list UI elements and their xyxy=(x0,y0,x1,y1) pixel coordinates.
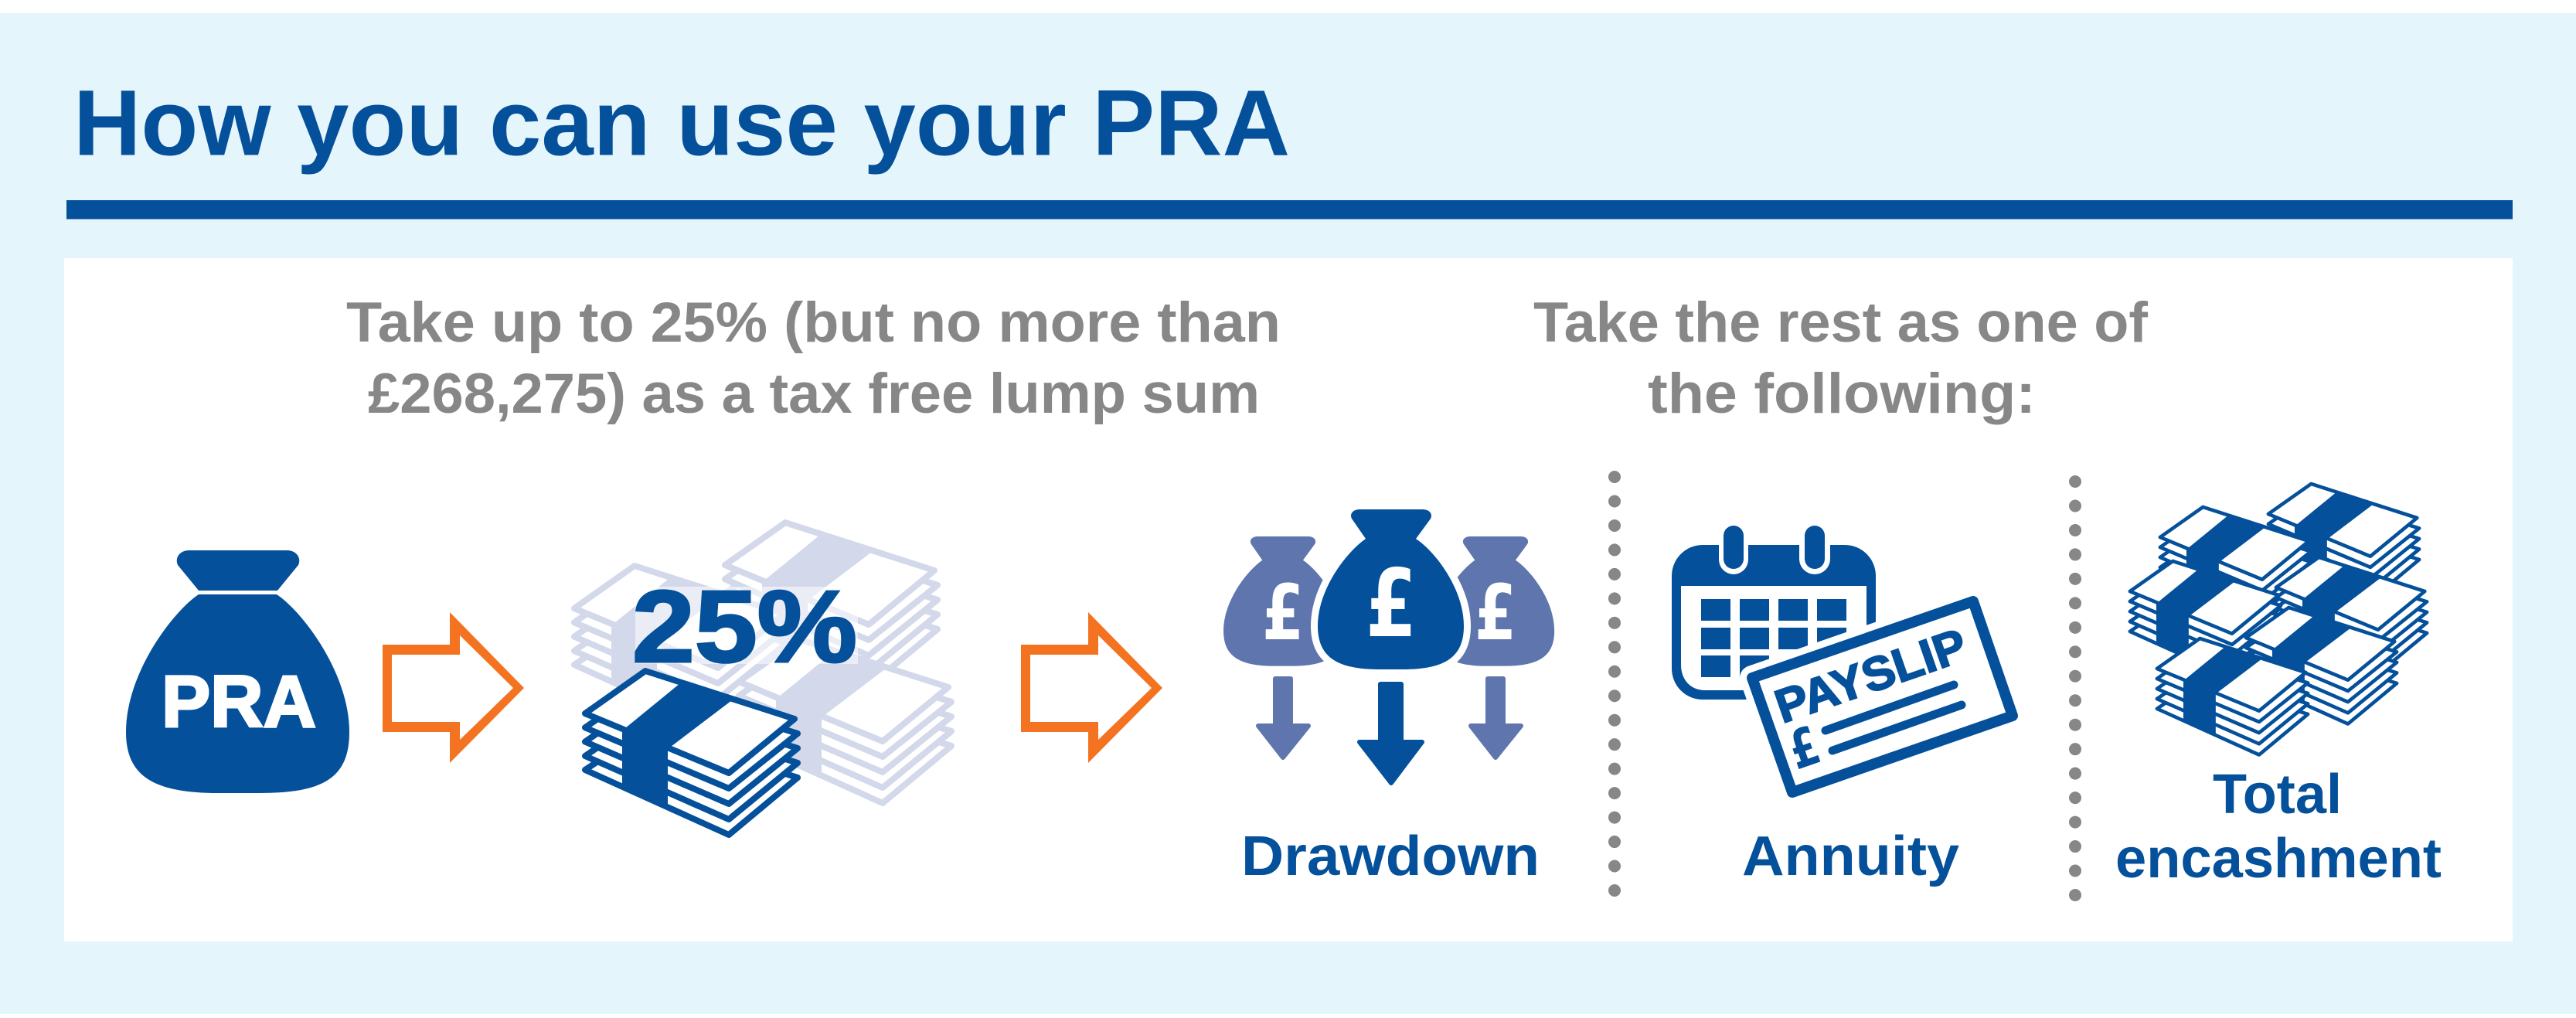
icon: lump sum money stack xyxy=(585,671,798,835)
icon: faded money stacks with 25 percent xyxy=(574,523,951,803)
icon: drawdown money bags: £ xyxy=(1475,569,1516,658)
label: Total encashment xyxy=(2115,764,2442,890)
text block: the rest heading: the following: xyxy=(1648,363,2036,425)
text block: the rest heading: Take the rest as one of xyxy=(1533,291,2149,354)
dotted divider right xyxy=(2069,482,2081,895)
panel: main content xyxy=(64,258,2513,941)
icon: drawdown money bags: £ xyxy=(1366,550,1417,659)
title rule xyxy=(66,200,2513,220)
text block: lump sum heading: Take up to 25% (but no more than xyxy=(346,291,1281,354)
icon: total encashment money stacks xyxy=(2130,484,2427,754)
icon: payslip: £ xyxy=(1781,715,1828,782)
label: Drawdown: Drawdown xyxy=(1241,826,1540,887)
label: Annuity: Annuity xyxy=(1742,826,1959,887)
text block: lump sum heading xyxy=(346,291,1281,425)
title: How you can use your PRA xyxy=(73,70,1290,175)
icon: faded money stacks with 25 percent: 25% xyxy=(632,570,857,683)
arrow: PRA to lump sum xyxy=(383,612,524,763)
label: Total encashment: Total xyxy=(2213,764,2342,826)
icon: drawdown money bags xyxy=(1223,509,1554,669)
icon: PRA money bag xyxy=(126,550,349,793)
icon: drawdown money bags: £ xyxy=(1262,569,1304,658)
icon: drawdown arrows xyxy=(1258,679,1521,783)
label: Total encashment: encashment xyxy=(2115,828,2442,890)
icon: calendar and payslip xyxy=(1672,519,2013,792)
icon: payslip: PAYSLIP xyxy=(1768,618,1973,733)
arrow: lump sum to options xyxy=(1021,612,1162,763)
icon: calendar xyxy=(1672,519,1876,700)
icon: PRA money bag: PRA xyxy=(162,661,316,743)
text block: the rest heading xyxy=(1533,291,2149,425)
text block: lump sum heading: £268,275) as a tax free lump sum xyxy=(368,363,1260,425)
icon: payslip xyxy=(1752,601,2013,792)
dotted divider left xyxy=(1608,477,1621,890)
